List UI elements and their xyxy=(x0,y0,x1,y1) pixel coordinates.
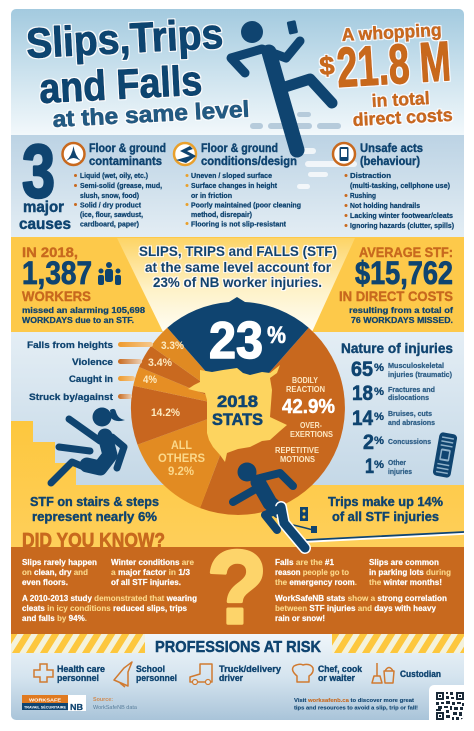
text block: did you know left facts: on clean, dry and xyxy=(22,568,88,577)
profession: health care: Health care xyxy=(57,664,105,675)
text block: nature of injuries: 65 xyxy=(351,358,373,381)
label: 23 percent: 23 xyxy=(209,312,263,370)
text block: nature of injuries: Musculoskeletal xyxy=(388,361,444,370)
label: all others: 9.2% xyxy=(168,464,194,478)
profession: truck driver xyxy=(190,664,282,684)
text block: website note: tips and resources to avoid a slip, trip or fall! xyxy=(294,706,418,712)
icon: people xyxy=(98,262,121,285)
label: 2018 stats: STATS xyxy=(212,410,263,429)
panel: floor and ground contaminants: Floor & ground xyxy=(89,143,166,155)
label: all others: OTHERS xyxy=(158,451,205,465)
text block: nature of injuries: % xyxy=(374,459,384,471)
text block: nature of injuries: Other xyxy=(388,458,406,467)
slice: bodily reaction xyxy=(200,328,345,515)
callout: total cost: in total xyxy=(371,88,430,111)
text block: did you know left facts: cleats in icy conditions reduced slips, trips xyxy=(22,604,188,613)
text block: trips stat: of all STF injuries xyxy=(332,509,439,524)
text block: nature of injuries: % xyxy=(374,386,384,398)
text block: nature of injuries: and abrasions xyxy=(388,418,435,427)
label: all others: ALL xyxy=(171,438,192,452)
text block: source: WorkSafeNB data xyxy=(93,705,138,711)
text block: did you know left facts: A 2010-2013 study demonstrated that wearing xyxy=(22,594,197,603)
label: bodily reaction: REPETITIVE xyxy=(275,446,320,455)
text block: nature of injuries: Concussions xyxy=(388,437,431,446)
logo: WorkSafeNB xyxy=(22,695,86,712)
text block: stairs stat: represent nearly 6% xyxy=(32,509,157,524)
profession: custodian xyxy=(372,663,441,683)
text block: nature of injuries: 18 xyxy=(352,382,373,405)
text block: STF share statement xyxy=(139,244,337,290)
callout: workers affected: WORKERS xyxy=(22,288,91,304)
text block: did you know right facts: between STF injuries and days with heavy xyxy=(275,604,437,613)
slice: 23 percent xyxy=(167,297,309,375)
slice: falls from heights xyxy=(152,328,206,381)
icon: phone xyxy=(333,143,355,165)
callout: average cost: $15,762 xyxy=(355,255,453,291)
map: New Brunswick xyxy=(188,365,287,462)
icon: question mark: ? xyxy=(207,530,267,646)
icon: electrical socket xyxy=(300,507,308,521)
label: bodily reaction: EXERTIONS xyxy=(290,430,334,439)
panel: causes background xyxy=(11,135,464,237)
callout: total cost xyxy=(319,20,453,130)
text block: nature of injuries: 14 xyxy=(352,407,373,430)
icon: running falling figure xyxy=(231,20,332,150)
label: 23 percent xyxy=(210,320,286,360)
icon: slip on liquid xyxy=(62,143,84,165)
callout: average cost xyxy=(339,244,453,325)
text block: did you know right facts: reason people go to xyxy=(275,568,349,577)
text block: stairs stat xyxy=(30,494,159,524)
text block: stairs stat: STF on stairs & steps xyxy=(30,494,159,509)
panel: centre light beam xyxy=(117,238,355,332)
callout: total cost: direct costs xyxy=(352,105,453,130)
label: bodily reaction xyxy=(275,376,335,464)
text block: did you know left facts xyxy=(22,558,197,623)
panel: floor and ground contaminants: Solid / dry product xyxy=(80,202,142,210)
title xyxy=(26,18,250,128)
panel: floor and ground contaminants: (ice, flour, sawdust, xyxy=(80,212,143,219)
panel: unsafe acts: Rushing xyxy=(350,193,376,200)
panel: floor and ground conditions: Uneven / sloped surface xyxy=(191,173,272,180)
profession: school: personnel xyxy=(136,673,177,684)
decorative speed dashes xyxy=(297,148,357,189)
panel: floor and ground conditions: Floor & ground xyxy=(201,143,278,155)
labels: small slices: 4% xyxy=(143,374,157,386)
label: bodily reaction: 42.9% xyxy=(282,396,335,418)
text block: did you know left facts: Slips rarely happen xyxy=(22,558,97,567)
text block: nature of injuries: % xyxy=(374,362,384,374)
text block: STF share statement: 23% of NB worker injuries. xyxy=(153,275,322,290)
panel: floor and ground contaminants: contaminants xyxy=(89,156,162,168)
heading: did you know: DID YOU KNOW? xyxy=(22,530,165,552)
panel: floor and ground contaminants: cardboard, paper) xyxy=(80,222,139,228)
panel: stairs and trip yellow area xyxy=(11,421,464,547)
panel: professions background xyxy=(11,634,464,720)
text block: did you know right facts: the winter months! xyxy=(369,578,442,587)
panel: unsafe acts: Lacking winter footwear/cleats xyxy=(350,213,453,220)
text block: nature of injuries: Fractures and xyxy=(388,385,435,394)
label: bodily reaction: REACTION xyxy=(286,385,325,394)
profession: chef xyxy=(293,664,363,684)
panel: floor and ground conditions: Surface changes in height xyxy=(191,183,278,190)
profession: school: School xyxy=(136,664,165,675)
text block: trips stat: Trips make up 14% xyxy=(328,494,443,509)
title: at the same level xyxy=(52,96,250,132)
panel: unsafe acts xyxy=(333,143,454,230)
label: 2018 stats: 2018 xyxy=(217,392,258,411)
text block: STF share statement: at the same level account for xyxy=(145,260,332,275)
text block: nature of injuries: % xyxy=(374,411,384,423)
panel: floor and ground contaminants xyxy=(62,143,166,228)
text block: website note: Visit worksafenb.ca to discover more great xyxy=(294,698,414,704)
text block: nature of injuries: injuries xyxy=(388,467,412,476)
icon: bandage xyxy=(432,432,458,478)
slice: violence xyxy=(139,346,206,394)
legend: left pie labels: Caught in xyxy=(69,374,113,384)
panel: statistics band background xyxy=(11,237,464,332)
callout: workers affected: missed an alarming 105,698 xyxy=(22,306,146,315)
panel: floor and ground contaminants: slush, snow, food) xyxy=(80,193,139,200)
text block: did you know left facts: of all STF injuries. xyxy=(111,578,181,587)
text block: did you know right facts: rain or snow! xyxy=(275,614,325,623)
logo: WorkSafeNB: WORKSAFE xyxy=(29,698,61,702)
text block: nature of injuries: 1 xyxy=(365,455,374,478)
labels: small slices: 14.2% xyxy=(151,407,180,419)
text block: did you know right facts: Slips are common xyxy=(369,558,439,567)
text block: did you know left facts: a major factor in 1/3 xyxy=(111,568,191,577)
panel: unsafe acts: Unsafe acts xyxy=(360,143,423,155)
legend: left pie labels: Struck by/against xyxy=(29,392,113,402)
text block: nature of injuries: injuries (traumatic) xyxy=(388,370,452,379)
panel: floor and ground conditions xyxy=(174,143,301,228)
profession: custodian: Custodian xyxy=(400,669,441,680)
callout: total cost: $ xyxy=(319,50,336,81)
panel: unsafe acts: Ignoring hazards (clutter, spills) xyxy=(350,223,454,230)
callout: average cost: IN DIRECT COSTS xyxy=(339,288,453,304)
callout: average cost: resulting from a total of xyxy=(349,306,453,315)
callout: workers affected xyxy=(22,244,146,325)
chart: injury pie xyxy=(131,297,345,515)
text block: did you know left facts: Winter conditions are xyxy=(111,558,195,567)
panel: header background xyxy=(11,9,464,135)
callout: workers affected: 1,387 xyxy=(22,255,92,291)
legend: left pie labels xyxy=(27,340,153,402)
profession: health care xyxy=(34,664,105,684)
logo: WorkSafeNB: TRAVAIL SÉCURITAIRE xyxy=(24,704,67,710)
profession: chef: or waiter xyxy=(318,673,355,684)
title: Slips,Trips xyxy=(25,10,224,67)
callout: average cost: AVERAGE STF: xyxy=(359,244,453,260)
slice: 14.2 percent xyxy=(130,386,207,444)
label: bodily reaction: MOTIONS xyxy=(280,455,316,464)
label: all others xyxy=(158,440,205,475)
logo: WorkSafeNB: NB xyxy=(70,703,83,712)
text block: nature of injuries: 2 xyxy=(363,431,374,454)
text block: source xyxy=(93,697,138,711)
profession: chef: Chef, cook xyxy=(318,664,363,675)
text block: did you know right facts: the emergency room . xyxy=(275,578,357,587)
panel: floor and ground contaminants: Liquid (wet, oily, etc.) xyxy=(80,173,148,180)
panel: floor and ground conditions: Poorly maintained (poor cleaning xyxy=(191,202,301,210)
text block: nature of injuries: % xyxy=(374,435,384,447)
text block: did you know right facts xyxy=(275,558,451,623)
text block: did you know right facts: in parking lots during xyxy=(369,568,451,577)
heading: 3 major causes: major xyxy=(23,199,64,216)
hazard stripes left xyxy=(11,634,145,653)
text block: nature of injuries: dislocations xyxy=(388,393,429,402)
labels: small slices xyxy=(143,340,184,419)
profession: truck driver: Truck/delivery xyxy=(219,664,282,675)
text block: nature of injuries xyxy=(341,340,453,478)
panel: unsafe acts: (behaviour) xyxy=(360,156,420,168)
text block: STF share statement: SLIPS, TRIPS and FALLS (STF) xyxy=(139,244,337,259)
slice: all others xyxy=(138,419,220,508)
profession: truck driver: driver xyxy=(219,673,243,684)
QR code xyxy=(429,685,469,725)
legend: left pie labels: Violence xyxy=(72,357,113,367)
heading: 3 major causes: 3 xyxy=(22,129,55,213)
text block: did you know right facts: WorkSafeNB stats show a strong correlation xyxy=(275,594,447,603)
label: bodily reaction: BODILY xyxy=(292,376,319,385)
heading: professions at risk: PROFESSIONS AT RISK xyxy=(155,639,321,656)
callout: total cost: A whopping xyxy=(341,20,442,45)
panel: middle background xyxy=(11,332,464,492)
icon: winding path xyxy=(174,143,196,165)
label: 23 percent: % xyxy=(267,322,286,349)
title: and Falls xyxy=(38,57,203,112)
panel: floor and ground conditions: conditions/design xyxy=(201,156,297,168)
text block: did you know right facts: Falls are the #1 xyxy=(275,558,335,567)
text block: source: Source: xyxy=(93,697,113,703)
text block: did you know left facts: and falls by 94%. xyxy=(22,614,87,623)
heading: 3 major causes: causes xyxy=(19,216,71,233)
text block: nature of injuries: Bruises, cuts xyxy=(388,409,432,418)
heading: 3 major causes xyxy=(19,143,71,230)
panel: floor and ground conditions: method, disrepair) xyxy=(191,212,252,219)
hazard stripes right xyxy=(332,634,464,653)
text block: website note xyxy=(294,698,418,712)
label: bodily reaction: OVER- xyxy=(300,421,322,430)
legend: left pie labels: Falls from heights xyxy=(27,340,113,350)
label: 2018 stats xyxy=(212,395,263,426)
slice: caught in xyxy=(133,367,207,402)
text block: nature of injuries: Nature of injuries xyxy=(341,340,453,356)
icon: tripping figure with cord xyxy=(233,462,464,548)
profession: school xyxy=(114,662,177,687)
text block: trips stat xyxy=(328,494,443,524)
panel: unsafe acts: Distraction xyxy=(350,173,391,180)
labels: small slices: 3.4% xyxy=(148,357,172,369)
icon: woman falling on stairs xyxy=(51,408,125,483)
panel: unsafe acts: Not holding handrails xyxy=(350,203,420,210)
profession: health care: personnel xyxy=(57,673,99,684)
panel: floor and ground conditions: Flooring is not slip-resistant xyxy=(191,222,287,228)
panel: unsafe acts: (multi-tasking, cellphone use) xyxy=(350,183,450,190)
panel: floor and ground conditions: or in friction xyxy=(191,193,232,200)
labels: small slices: 3.3% xyxy=(161,340,184,352)
panel: did you know band xyxy=(11,547,464,634)
panel: floor and ground contaminants: Semi-solid (grease, mud, xyxy=(80,183,162,190)
text block: did you know left facts: even floors. xyxy=(22,578,68,587)
callout: workers affected: IN 2018, xyxy=(22,244,78,260)
callout: average cost: 76 WORKDAYS MISSED. xyxy=(351,316,453,325)
callout: workers affected: WORKDAYS due to an STF. xyxy=(22,316,134,325)
